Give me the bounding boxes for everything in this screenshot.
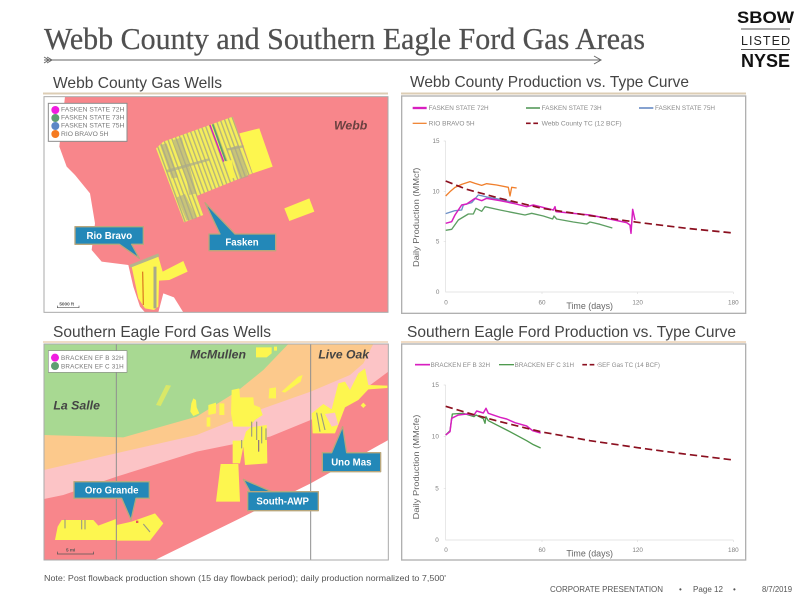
logo: SBOW listed NYSE: SBOW: [737, 8, 795, 27]
chart legend: RIO BRAVO 5H: [429, 121, 475, 128]
axis tick labels: 180: [728, 547, 739, 554]
map legend: FASKEN STATE 75H: [61, 123, 125, 130]
footer: CORPORATE PRESENTATION: [550, 585, 663, 594]
county label: McMullen: McMullen: [190, 347, 246, 361]
chart legend: [415, 362, 660, 369]
scale bar: 5 mi: [66, 547, 75, 552]
axis tick labels: 60: [538, 547, 546, 554]
callout: Oro Grande: [74, 482, 149, 520]
x axis title: Time (days): [566, 548, 613, 558]
panel: Webb County map: [44, 97, 388, 312]
title arrow: [44, 56, 601, 64]
panel: Southern Eagle Ford map: [44, 344, 388, 560]
scale bar: [57, 547, 94, 554]
axis tick labels: [432, 138, 739, 307]
y axis title: Daily Production (MMcfe): [411, 415, 421, 519]
axis tick labels: 15: [432, 382, 439, 389]
logo: SBOW listed NYSE: NYSE: [741, 51, 790, 71]
logo: SBOW listed NYSE: [737, 8, 795, 71]
footer: •: [679, 585, 682, 594]
Rio Bravo acreage: [129, 253, 188, 310]
series lines: [446, 181, 733, 233]
scale bar: 5000 ft: [59, 302, 75, 307]
heading: Southern Eagle Ford Gas Wells: Southern Eagle Ford Gas Wells: [53, 324, 271, 341]
chart legend: SEF Gas TC (14 BCF): [598, 362, 660, 369]
axis tick labels: 180: [728, 300, 739, 307]
chart legend: BRACKEN EF B 32H: [431, 362, 490, 369]
Fasken acreage: [156, 117, 273, 222]
callout: South-AWP: [243, 479, 318, 511]
footer: Page 12: [693, 585, 724, 594]
map legend: [48, 351, 127, 372]
axis tick labels: 10: [432, 188, 440, 195]
y axis title: Daily Production (MMcf): [411, 168, 421, 267]
footer: [550, 585, 793, 594]
heading: Webb County Gas Wells: Webb County Gas Wells: [53, 75, 222, 92]
map legend: FASKEN STATE 72H: [61, 107, 125, 114]
county label: Live Oak: Live Oak: [318, 347, 370, 361]
callout: Rio Bravo: [75, 227, 143, 258]
acreage blocks: [55, 347, 387, 541]
title: Webb County and Southern Eagle Ford Gas Areas: [44, 21, 645, 56]
map legend: BRACKEN EF B 32H: [61, 355, 124, 362]
callout: Oro Grande: Oro Grande: [85, 486, 139, 497]
chart legend: FASKEN STATE 75H: [655, 105, 715, 112]
scale bar: [57, 302, 79, 308]
x axis title: Time (days): [566, 301, 613, 311]
logo: SBOW listed NYSE: LISTED: [741, 34, 790, 48]
axis tick labels: 0: [435, 537, 439, 544]
map legend: BRACKEN EF C 31H: [61, 363, 124, 370]
axis tick labels: 10: [432, 434, 439, 441]
chart legend: FASKEN STATE 73H: [542, 105, 602, 112]
map legend: RIO BRAVO 5H: [61, 131, 109, 138]
footer: •: [733, 585, 736, 594]
heading: Webb County Production vs. Type Curve: Webb County Production vs. Type Curve: [410, 74, 689, 91]
axis tick labels: 120: [632, 300, 643, 307]
chart: Southern Eagle Ford production: [402, 344, 746, 560]
map legend: [48, 103, 127, 141]
footer: 8/7/2019: [762, 585, 793, 594]
axis tick labels: 60: [538, 300, 546, 307]
axis tick labels: 120: [632, 547, 643, 554]
axis tick labels: 15: [432, 138, 440, 145]
callout: South-AWP: South-AWP: [256, 497, 310, 508]
axes: [444, 141, 733, 294]
map legend: FASKEN STATE 73H: [61, 115, 125, 122]
callout: Uno Mas: Uno Mas: [331, 458, 371, 469]
chart legend: BRACKEN EF C 31H: [515, 362, 574, 369]
chart legend: Webb County TC (12 BCF): [542, 121, 622, 128]
callout: Rio Bravo: Rio Bravo: [87, 231, 132, 242]
heading: Southern Eagle Ford Production vs. Type Curve: Southern Eagle Ford Production vs. Type Curve: [407, 324, 736, 341]
series lines: [446, 406, 733, 460]
county label: La Salle: La Salle: [53, 398, 100, 412]
axis tick labels: 0: [444, 547, 448, 554]
chart: Webb County production: [402, 96, 746, 313]
axis tick labels: 5: [436, 239, 440, 246]
footnote: Note: Post flowback production shown (15 day flowback period); daily production normalized to 7,500': [44, 573, 446, 583]
axis tick labels: 0: [436, 289, 440, 296]
acreage block: [284, 198, 314, 221]
axis tick labels: 5: [435, 485, 439, 492]
axes: [444, 385, 733, 542]
axis tick labels: 0: [444, 300, 448, 307]
county label: Webb: Webb: [334, 119, 367, 133]
callout: Fasken: Fasken: [225, 238, 259, 249]
callout: Uno Mas: [322, 427, 381, 472]
chart legend: FASKEN STATE 72H: [429, 105, 489, 112]
axis tick labels: [432, 382, 739, 554]
chart legend: [413, 105, 715, 128]
callout: Fasken: [205, 203, 276, 251]
